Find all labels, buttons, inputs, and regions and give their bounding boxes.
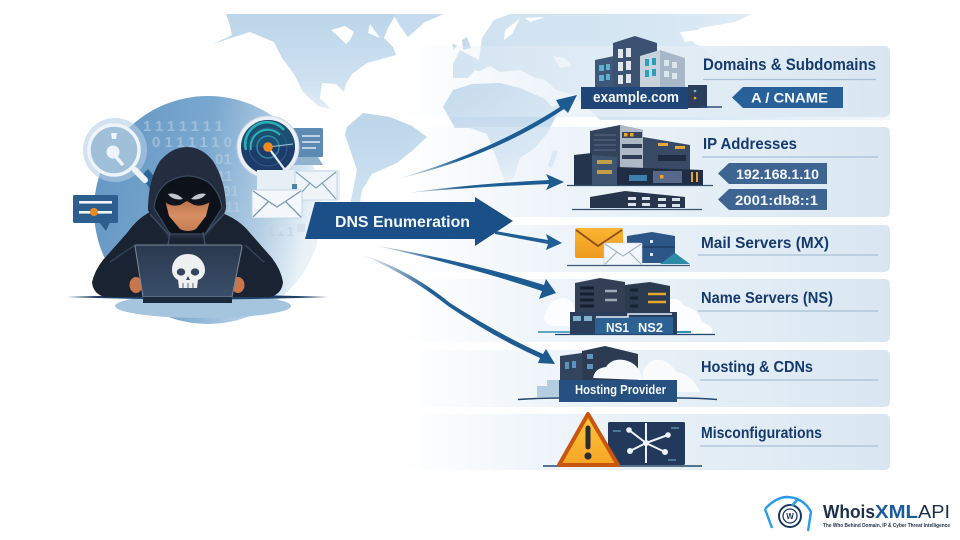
mask <box>163 190 212 206</box>
binary digits backdrop: 11 <box>225 199 241 216</box>
heading: mail servers: Mail Servers (MX) <box>701 235 829 252</box>
hacker scene circle <box>94 96 322 324</box>
panel: misconfigurations <box>400 414 890 470</box>
icon: hosting provider: Hosting Provider <box>575 383 666 397</box>
face <box>165 200 210 231</box>
arrow: to name servers <box>373 245 556 299</box>
icon: mail server <box>567 228 690 266</box>
world map background <box>213 14 890 240</box>
icon: skull <box>172 254 205 288</box>
panel: name servers <box>400 279 890 342</box>
logo: WhoisXML API: Whois <box>823 501 875 522</box>
hood <box>148 147 226 238</box>
heading: misconfigurations: Misconfigurations <box>701 425 822 442</box>
icon: warning and broken network <box>543 414 702 466</box>
icon: IP server cluster <box>567 125 713 210</box>
tag: IPv6 address: 2001:db8::1 <box>735 192 818 208</box>
arrow: to mail servers <box>495 231 562 250</box>
panel: hosting and CDNs <box>400 350 890 407</box>
icon: magnifying glass <box>83 118 158 189</box>
hands <box>130 277 142 293</box>
arrow: to hosting and CDNs <box>363 255 555 364</box>
tag: A / CNAME: A / CNAME <box>751 90 828 106</box>
icon: example.com building <box>581 36 722 109</box>
hoodie body <box>92 213 283 297</box>
heading: IP addresses: IP Addresses <box>703 136 797 153</box>
icon: document card behind radar <box>288 128 323 165</box>
ground shadow <box>67 294 328 300</box>
binary digits backdrop: 1111111 <box>143 118 223 135</box>
binary digits backdrop <box>143 118 294 239</box>
icon: hosting provider <box>518 346 717 402</box>
tag: IPv4 address: 192.168.1.10 <box>736 166 819 182</box>
arrow: to domains <box>397 95 577 179</box>
icon: chat card <box>73 195 118 231</box>
icon: name servers: NS1 <box>606 321 629 335</box>
logo: WhoisXML API: API <box>918 501 950 522</box>
hacker figure <box>67 147 328 303</box>
tag: IPv4 address <box>718 163 827 184</box>
binary digits backdrop: 1111 <box>258 224 294 239</box>
icon: envelopes <box>252 170 340 232</box>
tag: A / CNAME <box>732 87 843 108</box>
tag: IPv6 address <box>718 189 827 210</box>
logo: WhoisXML API: W <box>786 512 794 521</box>
hoodie strings and folds <box>150 214 224 245</box>
heading: name servers: Name Servers (NS) <box>701 290 833 307</box>
laptop <box>135 245 242 303</box>
banner arrow: DNS Enumeration: DNS Enumeration <box>335 214 470 231</box>
panel: mail servers <box>400 225 890 272</box>
heading: hosting and CDNs: Hosting & CDNs <box>701 359 813 376</box>
binary digits backdrop: 01 <box>222 183 239 200</box>
arrow: to IP addresses <box>407 174 564 193</box>
panel: domains and subdomains <box>400 46 890 117</box>
panel: IP addresses <box>400 127 890 217</box>
icon: name servers: NS2 <box>638 321 663 335</box>
heading: domains and subdomains: Domains & Subdomains <box>703 56 876 74</box>
binary digits backdrop: 01 <box>215 151 232 168</box>
icon: example.com building: example.com <box>593 90 679 106</box>
binary digits backdrop: 11 <box>217 168 233 185</box>
icon: radar <box>237 116 299 178</box>
logo: WhoisXML API <box>765 497 950 531</box>
binary digits backdrop: 0111110 <box>152 134 232 151</box>
banner arrow: DNS Enumeration <box>305 197 513 246</box>
icon: name servers <box>538 278 715 335</box>
logo mark <box>765 497 811 531</box>
logo: WhoisXML API: XML <box>875 501 918 522</box>
